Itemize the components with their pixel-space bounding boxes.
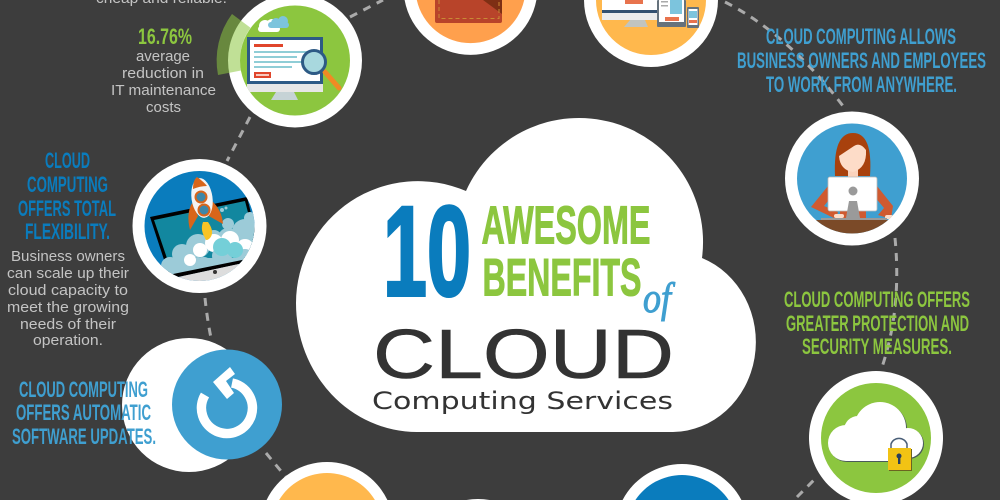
heading: FLEXIBILITY. [25,219,110,244]
white ring [623,464,741,500]
heading: COMPUTING [27,172,108,197]
dashed connector ring [205,0,897,497]
body copy [7,249,129,349]
white backing circle [122,338,256,472]
text: total flexibility [7,148,129,349]
white ring [809,371,943,500]
white ring [785,112,919,246]
yellow disc [596,0,706,55]
text: automatic software updates [12,377,156,449]
icon: woman at computer [811,133,893,235]
white ring [584,0,718,67]
text: work from anywhere [737,24,986,97]
title word awesome: AWESOME [482,196,650,256]
text: automatic software updates: SOFTWARE UPDATES. [12,424,156,449]
panel: remote worker [785,112,919,246]
icon: wallet [435,0,502,23]
heading: CLOUD [45,148,90,173]
title word cloud: CLOUD [373,315,674,393]
body copy: Business owners [11,249,125,265]
yellow disc [279,473,375,500]
panel: devices [584,0,718,67]
body copy: can scale up their [7,266,129,282]
white ring [132,159,266,293]
blue disc [635,475,729,500]
blue disc [144,171,254,281]
title [372,180,676,415]
panel: wallet [405,0,536,55]
text: automatic software updates: OFFERS AUTOMATIC [16,400,151,425]
icon: cloud with padlock [828,402,924,471]
body copy: meet the growing [7,300,129,316]
text: automatic software updates: CLOUD COMPUTING [19,377,148,402]
body copy: needs of their [20,317,116,333]
text: protection and security [784,287,970,359]
body copy: cloud capacity to [8,283,128,299]
panel: software updates [122,338,282,472]
title word benefits: BENEFITS [482,248,642,308]
icon: monitor with magnifier [247,16,339,100]
white ring [405,0,536,55]
orange disc [417,0,524,43]
white ring [228,0,362,127]
white ring [267,462,387,500]
panel: bottom left yellow circle [267,462,387,500]
title computing services: Computing Services [372,387,673,415]
panel: bottom center circle [466,498,490,500]
green disc [240,6,350,116]
panel: security [809,371,943,500]
statistic description: reduction in [122,66,204,82]
blue disc [797,124,907,234]
heading [18,148,116,244]
statistic description: costs [146,100,181,116]
panel: cost reduction [217,0,362,127]
icon: rocket over laptop [150,177,254,281]
green disc [821,383,931,493]
icon: refresh arrow [201,367,252,433]
text: maintenance statistic [111,24,216,116]
heading: OFFERS TOTAL [18,196,116,221]
icon: monitor tablet phone [602,0,699,28]
body copy: operation. [33,333,103,349]
title number 10: 10 [383,180,471,324]
progress arc [217,14,250,75]
panel: bottom right blue circle [623,464,741,500]
title word of: of [643,276,676,322]
statistic description [111,49,216,116]
statistic description: average [136,49,190,65]
central cloud [296,118,756,432]
statistic description: IT maintenance [111,83,216,99]
panel: flexibility [132,159,266,293]
statistic value: 16.76% [138,24,192,49]
blue disc [172,350,282,460]
